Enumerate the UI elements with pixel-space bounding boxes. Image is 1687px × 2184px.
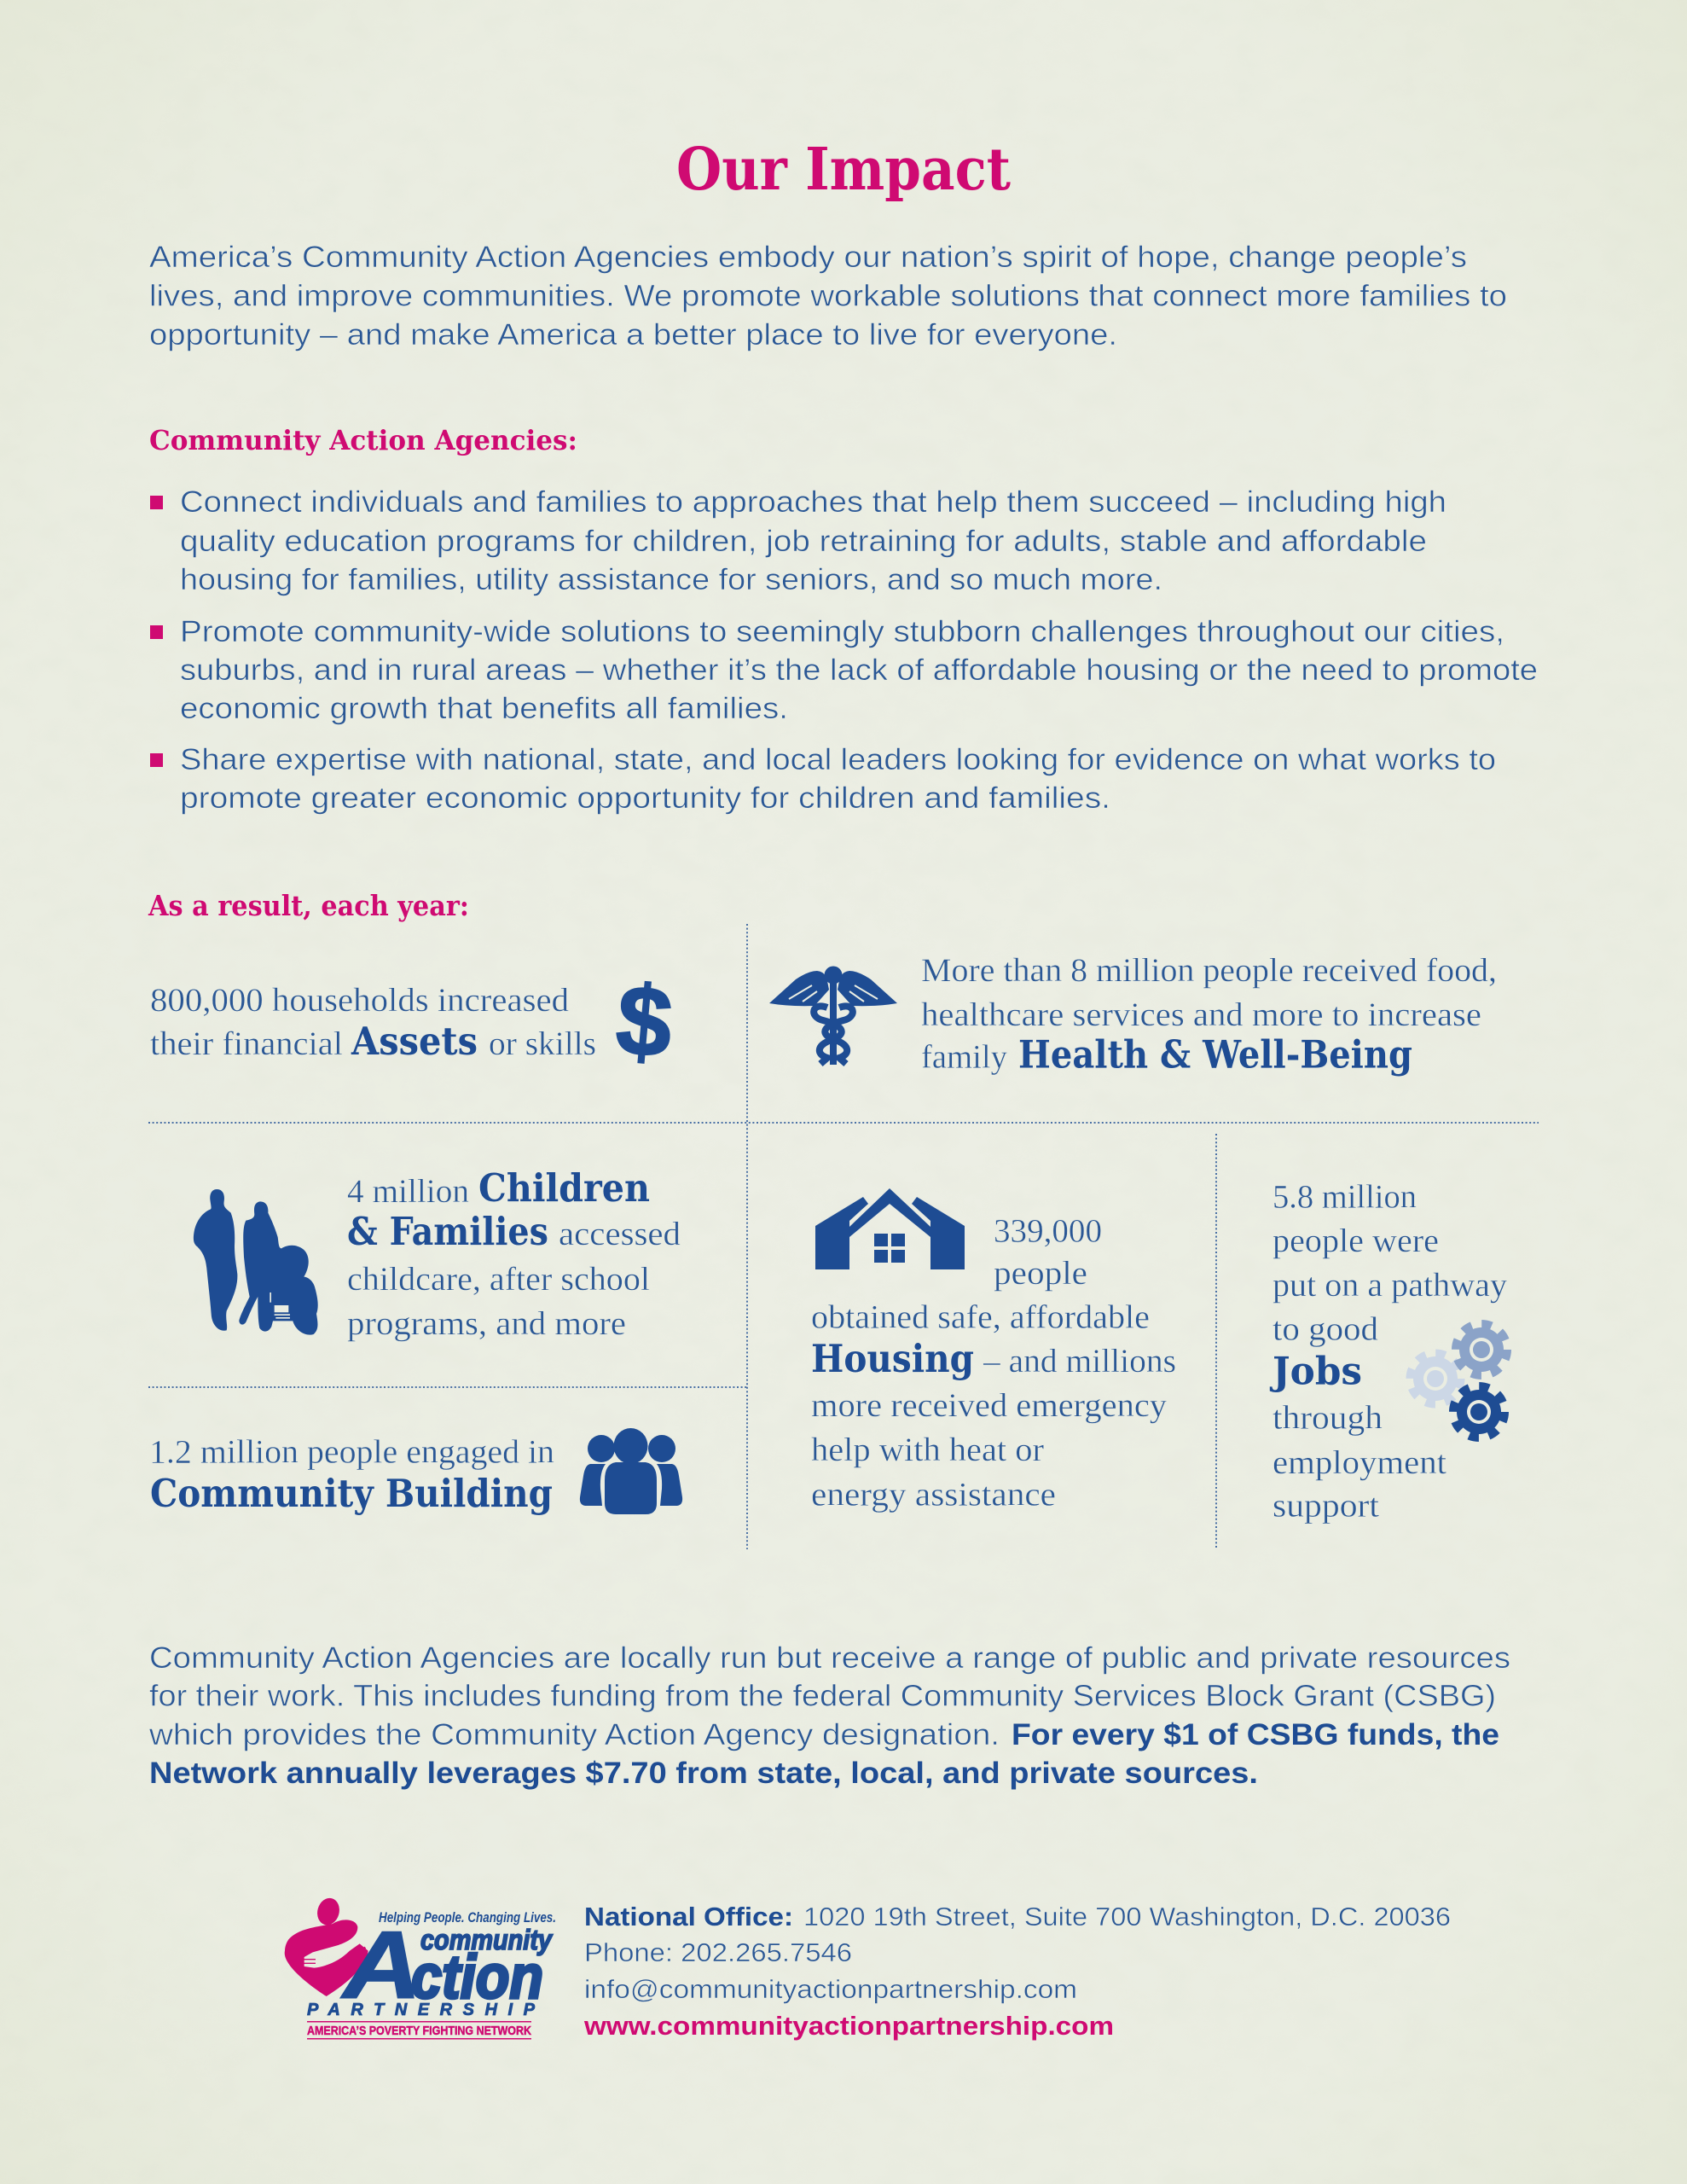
contact information: www.communityactionpartnership.com (583, 2011, 1114, 2041)
panel: jobs: 5.8 million (1272, 1179, 1417, 1215)
logo: Community Action Partnership: A (340, 1912, 421, 2018)
panel: community building (149, 1428, 682, 1516)
panel: children and families (194, 1165, 681, 1342)
panel: housing: obtained safe, affordable (811, 1298, 1150, 1336)
icon: gears (1411, 1325, 1506, 1437)
closing paragraph: Network annually leverages $7.70 from state, local, and private sources. (149, 1757, 1258, 1790)
closing paragraph: which provides the Community Action Agency designation. (148, 1718, 1000, 1751)
panel: health and well-being: healthcare services and more to increase (921, 996, 1481, 1033)
panel: jobs: put on a pathway (1272, 1267, 1508, 1304)
panel: housing: help with heat or (811, 1432, 1044, 1468)
panel: assets: 800,000 households increased (150, 982, 570, 1019)
bullet 2: suburbs, and in rural areas – whether it’s the lack of affordable housing or the need to promote (180, 653, 1538, 687)
icon: embracing heart (285, 1896, 368, 1996)
bullet 3: Share expertise with national, state, and local leaders looking for evidence on what works to (180, 743, 1496, 776)
icon: family with stroller (194, 1189, 318, 1335)
panel: jobs: to good (1272, 1310, 1379, 1348)
panel: assets: Assets (351, 1019, 478, 1064)
panel: health and well-being: Health & Well-Being (1018, 1032, 1412, 1077)
contact information (583, 1902, 1451, 2041)
panel: housing: Housing (811, 1336, 974, 1381)
panel: jobs (1269, 1179, 1508, 1524)
panel: jobs: employment (1272, 1444, 1446, 1481)
bullet 3 (150, 743, 1496, 815)
panel: children and families: programs, and more (347, 1305, 626, 1342)
contact information: National Office: (584, 1902, 793, 1931)
contact information: info@communityactionpartnership.com (584, 1974, 1077, 2004)
logo: Community Action Partnership: ction (411, 1943, 543, 2012)
title: Our Impact (676, 136, 1012, 204)
icon: group of people (580, 1428, 682, 1514)
panel: children and families: Children (478, 1165, 650, 1211)
panel: children and families: childcare, after school (347, 1261, 650, 1298)
bullet list (150, 485, 1538, 815)
bullet 1: housing for families, utility assistance for seniors, and so much more. (180, 563, 1162, 596)
panel: health and well-being: More than 8 million people received food, (921, 952, 1497, 989)
panel: assets: their financial (150, 1025, 343, 1062)
icon: dollar sign: $ (612, 963, 676, 1079)
panel: jobs: Jobs (1269, 1348, 1362, 1394)
panel: assets: or skills (489, 1025, 596, 1062)
bullet 1: quality education programs for children, job retraining for adults, stable and affordable (180, 525, 1427, 558)
panel: health and well-being (769, 952, 1497, 1077)
icon: caduceus (769, 966, 897, 1065)
intro paragraph (149, 241, 1507, 351)
panel: children and families: 4 million (347, 1173, 469, 1210)
icon: house (815, 1188, 965, 1269)
panel: housing (811, 1188, 1176, 1513)
panel: health and well-being: family (921, 1039, 1007, 1075)
panel: community building: Community Building (150, 1471, 553, 1516)
bullet 2 (150, 615, 1538, 725)
panel: housing: energy assistance (811, 1476, 1056, 1513)
contact information: 1020 19th Street, Suite 700 Washington, D.C. 20036 (803, 1902, 1451, 1931)
bullet 3: promote greater economic opportunity for children and families. (180, 781, 1110, 815)
logo: Community Action Partnership: AMERICA’S POVERTY FIGHTING NETWORK (307, 2024, 531, 2038)
closing paragraph: Community Action Agencies are locally run but receive a range of public and private resources (149, 1641, 1510, 1675)
bullet 2: economic growth that benefits all families. (180, 692, 788, 725)
intro paragraph: lives, and improve communities. We promote workable solutions that connect more families to (149, 280, 1507, 312)
logo: Community Action Partnership: Helping People. Changing Lives. (379, 1909, 556, 1926)
panel: community building: 1.2 million people engaged in (149, 1433, 554, 1471)
logo: Community Action Partnership (285, 1896, 556, 2039)
intro paragraph: America’s Community Action Agencies embody our nation’s spirit of hope, change people’s (149, 241, 1467, 274)
panel: housing: more received emergency (811, 1387, 1168, 1424)
panel: children and families: accessed (559, 1216, 681, 1252)
subheading: Community Action Agencies: Community Action Agencies: (149, 424, 577, 456)
panel: jobs: through (1272, 1399, 1383, 1437)
bullet 1: Connect individuals and families to approaches that help them succeed – including high (180, 485, 1446, 519)
closing paragraph: For every $1 of CSBG funds, the (1012, 1718, 1499, 1751)
logo: Community Action Partnership: community (420, 1924, 553, 1955)
contact information: Phone: 202.265.7546 (584, 1937, 852, 1967)
panel: housing: people (994, 1255, 1087, 1292)
subheading: As a result: As a result, each year: (148, 889, 469, 922)
bullet 1 (150, 485, 1446, 596)
closing paragraph: for their work. This includes funding from the federal Community Services Block Grant (CSBG) (149, 1679, 1496, 1713)
panel: housing: – and millions (983, 1343, 1176, 1380)
panel: assets (150, 963, 676, 1079)
intro paragraph: opportunity – and make America a better place to live for everyone. (149, 318, 1117, 351)
logo: Community Action Partnership: PARTNERSHIP (307, 2001, 536, 2019)
panel: jobs: support (1272, 1488, 1379, 1524)
bullet 2: Promote community-wide solutions to seemingly stubborn challenges throughout our cities, (180, 615, 1504, 648)
panel: jobs: people were (1272, 1223, 1439, 1259)
closing paragraph (148, 1641, 1510, 1790)
panel: children and families: & Families (347, 1209, 548, 1254)
panel: housing: 339,000 (994, 1213, 1102, 1249)
